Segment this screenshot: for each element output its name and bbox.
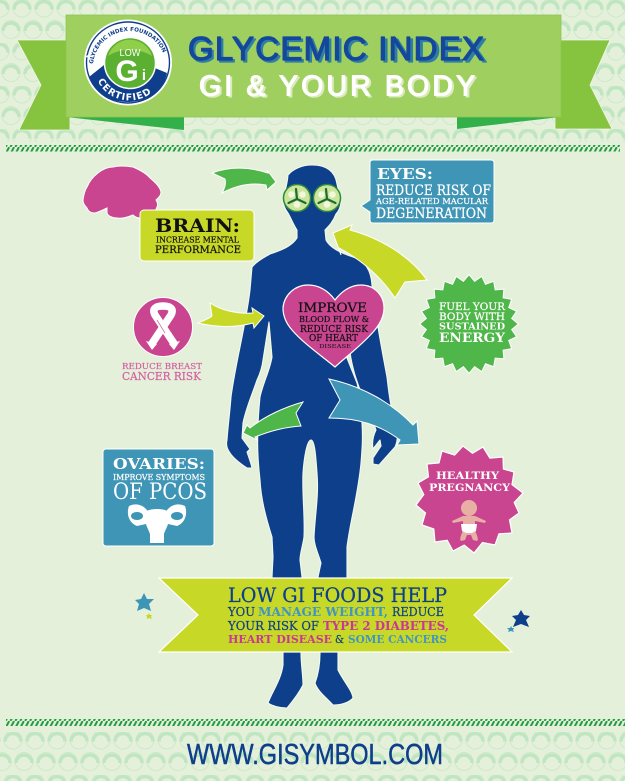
brain text line 1: INCREASE MENTAL (156, 236, 239, 246)
stars left (135, 593, 154, 619)
banner line 1 (227, 604, 444, 619)
banner line 1: MANAGE WEIGHT, (258, 604, 388, 619)
badge: low GI certified: LOW (120, 48, 141, 59)
ribbon main panel (66, 15, 561, 117)
ribbon right tail (555, 40, 612, 129)
banner line 2 (227, 619, 449, 633)
title: GLYCEMIC INDEX (190, 32, 487, 69)
badge: low GI certified: CERTIFIED (98, 78, 150, 100)
heart line 1: BLOOD FLOW & (299, 315, 369, 325)
banner line 3 (228, 633, 447, 646)
subtitle: GI & YOUR BODY (201, 72, 477, 104)
top background pattern (0, 0, 625, 142)
arrow: ribbon to chest (198, 303, 264, 328)
banner line 3: & (335, 633, 344, 646)
heart line 2: REDUCE RISK (300, 324, 369, 335)
banner line 2: TYPE 2 DIABETES, (323, 619, 449, 633)
badge: low GI certified: i (142, 67, 146, 84)
top stripe divider (6, 145, 620, 152)
badge: low GI certified (84, 20, 172, 106)
heart heading: IMPROVE (298, 301, 367, 316)
arrow: energy to body (333, 225, 427, 298)
banner line 2: YOUR RISK OF (227, 619, 319, 633)
ribbon left fold (66, 117, 184, 130)
banner line 1: YOU (227, 605, 255, 619)
subtitle: GI & YOUR BODY (199, 70, 475, 102)
arrow: brain to head (212, 168, 276, 193)
arrow: hip to ovaries (243, 402, 303, 440)
icon: brain (83, 166, 161, 219)
bottom banner (159, 578, 512, 652)
banner line 3: SOME CANCERS (348, 633, 447, 646)
icon: baby (452, 500, 486, 541)
eyes text line 3: DEGENERATION (376, 206, 487, 222)
stars right (507, 610, 530, 632)
bottom background pattern (0, 729, 625, 781)
heart panel (283, 285, 384, 367)
icon: cucumber eyes (283, 184, 341, 212)
energy line 4: ENERGY (439, 331, 506, 346)
ribbon left tail (17, 40, 70, 130)
body silhouette (227, 165, 397, 708)
energy line 1: FUEL YOUR (439, 301, 506, 313)
heart line 4: DISEASE (319, 344, 351, 350)
ribbon right fold (457, 117, 560, 129)
badge: sustained energy (420, 276, 518, 372)
banner heading: LOW GI FOODS HELP (228, 583, 447, 607)
banner line 3: HEART DISEASE (228, 633, 332, 646)
badge: low GI certified: GLYCEMIC INDEX FOUNDATION (89, 26, 166, 64)
brain heading: BRAIN: (155, 215, 240, 237)
website url: WWW.GISYMBOL.COM (187, 739, 443, 771)
ovaries line 1: IMPROVE SYMPTOMS (113, 473, 205, 482)
icon: uterus (128, 506, 186, 543)
title: GLYCEMIC INDEX (188, 30, 484, 67)
caption: reduce breast cancer risk (122, 362, 202, 383)
ovaries heading: OVARIES: (113, 455, 205, 473)
banner line 1: REDUCE (392, 605, 444, 619)
panel: eyes (361, 160, 494, 223)
caption: reduce breast cancer risk: REDUCE BREAST (122, 362, 202, 372)
panel: ovaries (103, 449, 214, 546)
bottom stripe divider (6, 719, 625, 726)
ovaries line 2: OF PCOS (113, 480, 207, 505)
icon: breast cancer ribbon (134, 298, 192, 356)
pregnancy line 2: PREGNANCY (429, 482, 511, 494)
panel: brain (140, 210, 254, 261)
eyes text line 1: REDUCE RISK OF (376, 183, 491, 199)
arrow: abdomen to pregnancy (329, 379, 419, 445)
eyes text line 2: AGE-RELATED MACULAR (375, 197, 489, 206)
energy line 3: SUSTAINED (439, 322, 505, 332)
header ribbon (17, 15, 612, 130)
heart line 3: OF HEART (309, 334, 358, 344)
energy line 2: BODY WITH (439, 311, 505, 323)
eyes heading: EYES: (377, 165, 433, 183)
brain text line 2: PERFORMANCE (155, 244, 241, 256)
badge: low GI certified: G (115, 55, 139, 88)
pregnancy line 1: HEALTHY (436, 470, 500, 482)
badge: healthy pregnancy (416, 446, 523, 553)
caption: reduce breast cancer risk: CANCER RISK (122, 370, 202, 383)
